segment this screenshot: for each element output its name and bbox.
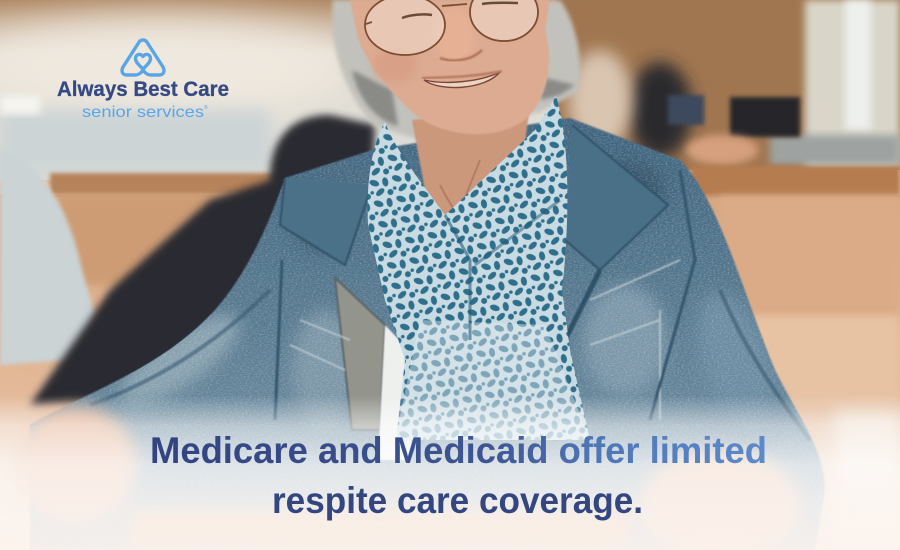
white fade overlay [0,395,900,550]
icon: triangle with heart [122,40,164,75]
registered mark: ® [204,104,208,111]
woman: jacket [30,118,830,550]
jacket highlights [109,160,787,436]
background person in white shirt [0,150,96,365]
denim texture [60,118,817,475]
face [350,0,550,134]
hair [332,0,580,140]
logo: Always Best Care senior services [57,40,229,121]
neck [412,105,530,260]
dark chair [30,115,375,405]
scarf [368,96,590,440]
jacket details [90,125,810,440]
shirt [378,325,418,460]
smile [424,72,500,88]
nose [440,50,482,60]
headline [150,430,767,521]
logo wordmark: Always Best Care [57,78,229,101]
logo tagline: senior services [82,104,204,121]
headline line 1: Medicare and Medicaid offer limited [150,430,767,471]
glasses [365,0,538,55]
headline line 2: respite care coverage. [272,480,643,521]
foreground hands and table [13,407,900,550]
